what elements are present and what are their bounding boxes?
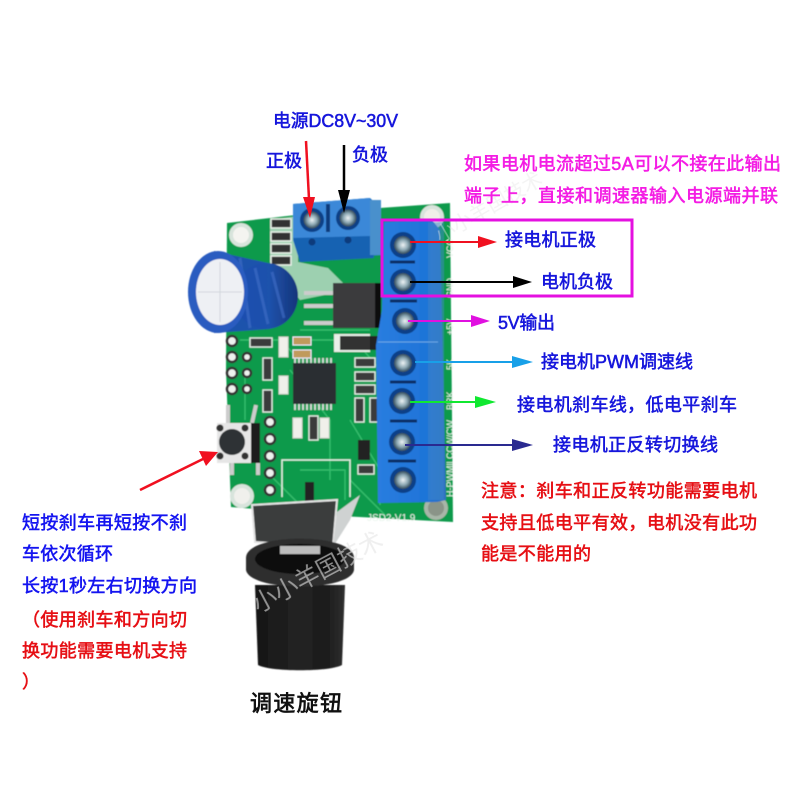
pot outline on silk [282,460,350,497]
knob inner well [255,544,345,574]
bracket wing [333,495,360,547]
SOT transistor [358,440,370,460]
silk labels on board: +5V [445,319,455,335]
small resistors top [271,219,291,265]
upper-left pale board area [270,216,350,300]
pot shaft stub [305,482,314,507]
LEDs [279,337,329,438]
usage line 6: ） [22,672,40,692]
MOSFET [304,283,381,328]
driver IC [293,358,336,410]
electrolytic capacitor [188,251,298,333]
note line 1: 如果电机电流超过5A可以不接在此输出 [464,154,781,174]
knob stem [280,546,320,554]
negative label: 负极 [352,145,388,165]
current sense resistors [293,337,311,358]
arrow: brake [410,396,496,408]
red caution note [481,481,757,564]
silk labels on board: H-PWMll CCW/CW [445,420,455,497]
motor output highlight box [382,220,632,296]
watermarks [248,167,546,618]
silk labels on board: BRK [445,391,455,410]
knob rim [246,538,354,586]
knob caption: 调速旋钮 [250,691,342,716]
circuit board [226,203,453,522]
input terminal block [293,198,381,262]
label: 5V output: 5V输出 [498,313,555,333]
motor driver board photo [188,198,455,670]
terminal screws [389,232,418,493]
arrow: direction [405,439,533,451]
silk labels on board [367,238,455,524]
usage line 4: （使用刹车和方向切 [22,610,187,630]
label: motor positive: 接电机正极 [505,230,596,250]
schottky diode [334,334,380,352]
arrow: power positive [303,141,315,218]
potentiometer and knob [246,482,360,670]
button usage note [22,513,197,692]
caution line 1: 注意：刹车和正反转功能需要电机 [481,481,757,501]
caution line 3: 能是不能用的 [481,544,591,564]
silk labels on board: GND [445,278,455,298]
arrow: button [140,451,218,490]
mounting hole top left [229,223,253,247]
arrow: motor positive [410,236,497,248]
magenta note [464,154,781,206]
note line 2: 端子上，直接和调速器输入电源端并联 [464,186,778,206]
mounting hole bottom right [424,496,448,520]
power supply heading: 电源DC8V~30V [273,111,398,131]
output terminal block [376,220,446,503]
pot bracket [252,500,337,547]
label: PWM: 接电机PWM调速线 [541,352,693,372]
usage line 2: 车依次循环 [22,544,113,564]
watermarks: 小小羊国技术 [248,527,388,618]
usage line 5: 换功能需要电机支持 [22,641,187,661]
positive label: 正极 [266,151,302,171]
arrow: 5V [408,315,490,327]
board traces [240,330,385,515]
caution line 2: 支持且低电平有效，电机没有此功 [481,513,757,533]
arrow: motor negative [410,276,532,288]
label: motor negative: 电机负极 [541,272,613,292]
silk labels on board: JSD2-V1.9 [367,513,416,524]
mounting hole top right [420,205,444,229]
arrow: PWM [415,356,533,368]
SMD parts right of IC [250,338,379,474]
watermarks: 小小羊国技术 [431,167,546,247]
arrow: power negative [338,145,350,213]
silk labels on board: VCC [445,238,455,258]
label: direction: 接电机正反转切换线 [553,435,718,455]
usage line 3: 长按1秒左右切换方向 [22,576,197,596]
silk labels on board: 5K [445,359,455,370]
usage line 1: 短按刹车再短按不刹 [22,513,187,533]
knob body [255,585,345,670]
tact button [216,405,260,475]
label: brake: 接电机刹车线，低电平刹车 [517,395,737,415]
pin header pads [227,336,275,495]
mounting hole bottom left [230,484,254,508]
